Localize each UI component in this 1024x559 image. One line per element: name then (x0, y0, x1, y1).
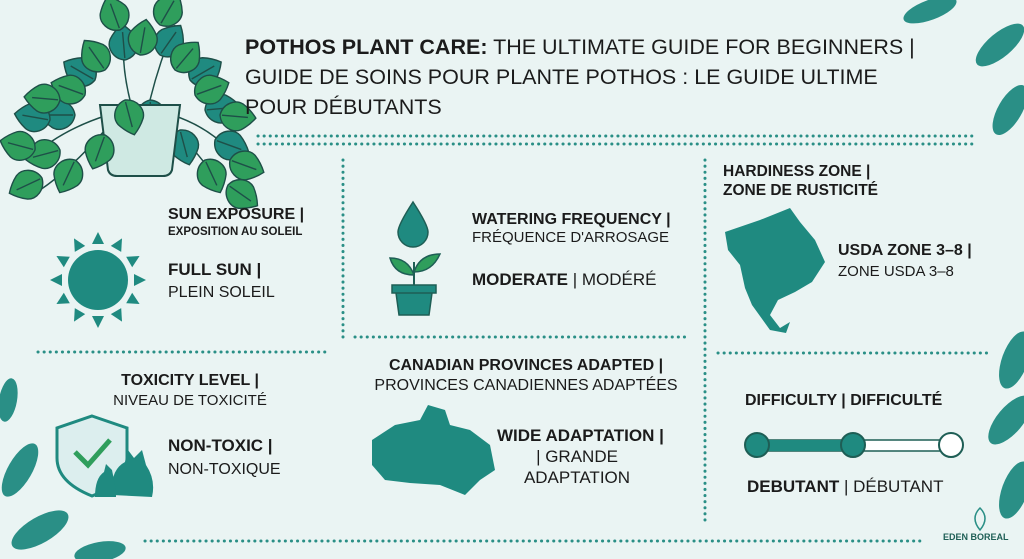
panel: canadian provinces (374, 357, 678, 394)
text: ZONE USDA 3–8 (838, 263, 954, 280)
title: POUR DÉBUTANTS (245, 95, 442, 119)
title: POTHOS PLANT CARE: THE ULTIMATE GUIDE FOR BEGINNERS | (245, 35, 915, 59)
difficulty slider (745, 433, 963, 457)
logo leaf (975, 508, 985, 530)
icon: water drop and sprout (390, 202, 440, 315)
logo text: EDEN BOREAL (943, 532, 1009, 542)
panel: difficulty: DIFFICULTY | DIFFICULTÉ (745, 392, 942, 409)
title (245, 35, 915, 119)
panel: watering (472, 211, 671, 289)
panel: watering: WATERING FREQUENCY | (472, 211, 671, 228)
panel: sun exposure: FULL SUN | (168, 260, 261, 279)
panel: toxicity (113, 372, 267, 409)
text: NON-TOXIC | (168, 436, 273, 455)
panel: toxicity: TOXICITY LEVEL | (121, 372, 259, 389)
title: GUIDE DE SOINS POUR PLANTE POTHOS : LE GUIDE ULTIME (245, 65, 878, 89)
icon: sun (50, 232, 146, 328)
panel: sun exposure: PLEIN SOLEIL (168, 284, 275, 301)
icon: north america map (725, 208, 825, 333)
panel: sun exposure (168, 206, 304, 301)
panel: canadian provinces: CANADIAN PROVINCES ADAPTED | (389, 357, 663, 374)
panel: hardiness (723, 163, 878, 199)
panel: toxicity: NIVEAU DE TOXICITÉ (113, 392, 267, 409)
panel: sun exposure: EXPOSITION AU SOLEIL (168, 226, 302, 238)
text: | GRANDE (536, 447, 618, 466)
panel: watering: MODERATE | MODÉRÉ (472, 270, 656, 289)
text: WIDE ADAPTATION | (497, 426, 664, 445)
text: ADAPTATION (524, 468, 630, 487)
icon: pothos plant (0, 0, 269, 217)
panel: hardiness: HARDINESS ZONE | (723, 163, 870, 180)
panel: sun exposure: SUN EXPOSURE | (168, 206, 304, 223)
decorative dotted lines (38, 136, 990, 541)
panel: watering: FRÉQUENCE D'ARROSAGE (472, 229, 669, 246)
text: DEBUTANT | DÉBUTANT (747, 477, 943, 496)
icon: shield with pets (57, 416, 153, 497)
text: USDA ZONE 3–8 | (838, 242, 972, 259)
panel: hardiness: ZONE DE RUSTICITÉ (723, 182, 878, 199)
text: NON-TOXIQUE (168, 461, 281, 478)
icon: canada map (372, 405, 495, 495)
panel: canadian provinces: PROVINCES CANADIENNES ADAPTÉES (374, 377, 678, 394)
